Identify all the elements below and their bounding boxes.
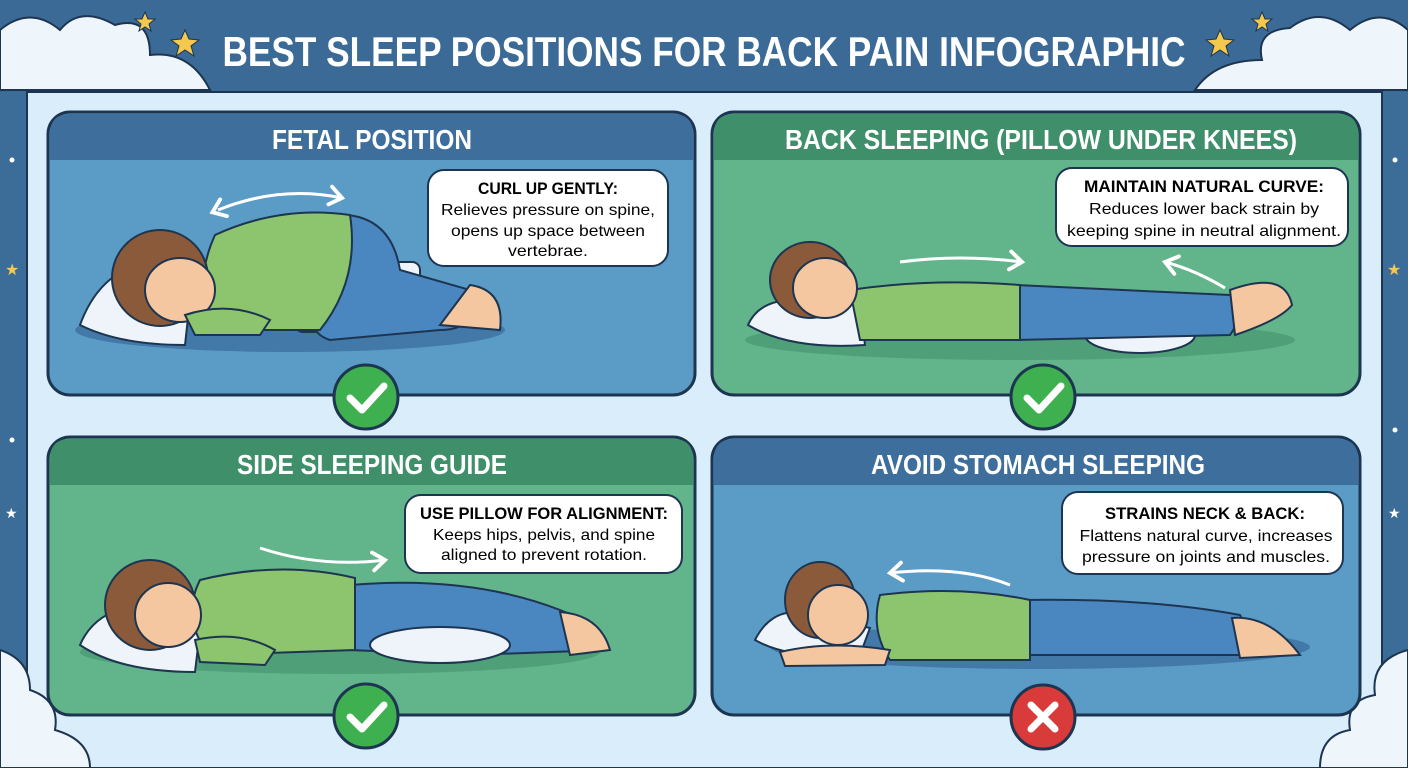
callout: strains neck and back: STRAINS NECK & BACK: <box>1105 504 1305 523</box>
callout: use pillow for alignment: aligned to prevent rotation. <box>441 547 647 564</box>
callout: curl up gently <box>428 170 668 266</box>
callout: strains neck and back <box>1062 492 1343 574</box>
illustration: stomach <box>755 562 1310 669</box>
callout: strains neck and back: Flattens natural curve, increases <box>1080 528 1332 545</box>
heading: stomach: AVOID STOMACH SLEEPING <box>871 449 1205 480</box>
panel: avoid stomach sleeping <box>712 437 1360 715</box>
background frame: ★ <box>1388 505 1401 521</box>
callout: maintain natural curve: Reduces lower back strain by <box>1089 201 1319 218</box>
icon: check fetal <box>334 365 398 429</box>
title: BEST SLEEP POSITIONS FOR BACK PAIN INFOGRAPHIC <box>222 28 1186 75</box>
callout: use pillow for alignment <box>405 495 682 573</box>
callout: curl up gently: CURL UP GENTLY: <box>478 179 618 198</box>
background frame: ★ <box>5 262 19 279</box>
icon: cross stomach <box>1011 685 1075 749</box>
callout: maintain natural curve: MAINTAIN NATURAL CURVE: <box>1084 177 1324 196</box>
callout: curl up gently: vertebrae. <box>508 243 588 260</box>
illustration: back <box>745 242 1295 360</box>
panel: back sleeping <box>712 112 1360 395</box>
illustration: fetal <box>75 212 505 352</box>
heading: fetal: FETAL POSITION <box>272 124 472 155</box>
background frame: ★ <box>5 505 18 521</box>
callout: use pillow for alignment: Keeps hips, pelvis, and spine <box>433 527 655 544</box>
panel: side sleeping <box>48 437 695 715</box>
illustration: side <box>80 560 610 674</box>
callout: maintain natural curve: keeping spine in neutral alignment. <box>1067 223 1341 240</box>
callout: use pillow for alignment: USE PILLOW FOR ALIGNMENT: <box>420 504 668 523</box>
callout: maintain natural curve <box>1056 168 1348 246</box>
callout: strains neck and back: pressure on joints and muscles. <box>1082 549 1330 566</box>
background frame: ★ <box>1387 262 1401 279</box>
icon: check back <box>1011 365 1075 429</box>
panel: fetal position <box>48 112 695 395</box>
stars <box>135 12 1272 56</box>
heading: side: SIDE SLEEPING GUIDE <box>237 449 507 480</box>
callout: curl up gently: Relieves pressure on spine, <box>441 202 655 219</box>
heading: back: BACK SLEEPING (PILLOW UNDER KNEES) <box>785 124 1297 155</box>
callout: curl up gently: opens up space between <box>451 223 645 240</box>
icon: check side <box>334 684 398 748</box>
